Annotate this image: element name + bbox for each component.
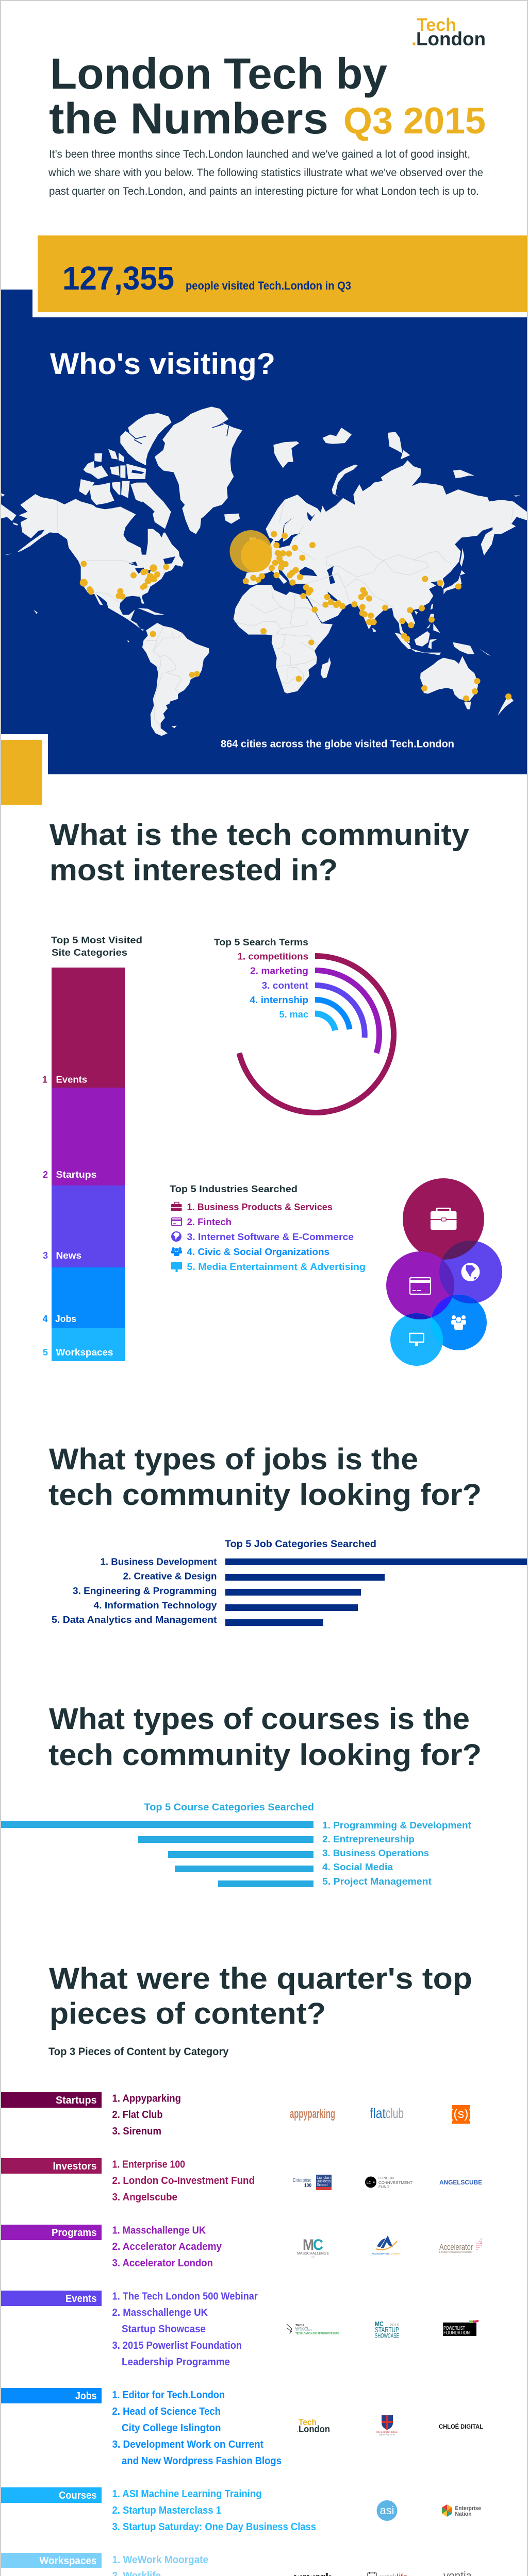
title: London Tech by <box>50 49 387 98</box>
panel: visitor count banner <box>38 235 527 312</box>
logo: powerlist foundation: POWERLIST <box>443 2326 465 2331</box>
logo: lcif: CO-INVESTMENT <box>378 2181 413 2185</box>
intro text: It’s been three months since Tech.London launched and we've gained a lot of good insight, <box>49 148 470 160</box>
panel: visitor count banner: people visited Tech.London in Q3 <box>186 279 351 292</box>
chart: top 5 industries searched list <box>170 1184 366 1272</box>
chart: top 5 industries searched list: 5. Media Entertainment & Advertising <box>187 1262 366 1272</box>
panel: jobs <box>1 2388 483 2467</box>
logo: tech.london <box>296 2417 330 2434</box>
logo: appyparking: appyparking <box>290 2107 335 2121</box>
chart: top 5 course categories: 1. Programming & Development <box>322 1820 471 1831</box>
panel: programs: 3. Accelerator London <box>112 2258 213 2269</box>
logo: Tech.London header: . <box>411 28 417 49</box>
chart: top 5 most visited site categories <box>42 935 142 1361</box>
accent: yellow square <box>1 734 48 805</box>
chart: top 5 job categories: 3. Engineering & Programming <box>73 1585 217 1596</box>
logo: sirenum: ((s)) <box>449 2107 473 2121</box>
heading: top pieces of content: pieces of content? <box>50 1997 326 2030</box>
panel: programs <box>1 2225 482 2269</box>
chart: top 5 job categories: 5. Data Analytics and Management <box>52 1614 217 1625</box>
heading: who's visiting: Who's visiting? <box>50 347 275 381</box>
panel: jobs: 2. Head of Science Tech <box>112 2406 221 2417</box>
icon: globe <box>461 1263 480 1281</box>
chart: top 5 job categories: Top 5 Job Categories Searched <box>225 1539 376 1550</box>
icon: small briefcase <box>171 1202 182 1211</box>
chart: top 5 search terms: 3. content <box>262 980 308 991</box>
panel: investors: Investors <box>53 2161 97 2172</box>
logo: masschallenge: UK <box>311 2256 315 2259</box>
logo: enterprise 100: London <box>317 2175 331 2180</box>
logo: lcif: LCIF <box>367 2180 375 2184</box>
logo: accelerator: Accelerator <box>439 2242 473 2252</box>
logo: city college islington: opportunity for all <box>379 2433 395 2436</box>
chart: top 5 industries searched list: Top 5 Industries Searched <box>170 1184 298 1194</box>
london bubble <box>230 530 272 572</box>
icon: small billboard <box>171 1262 182 1272</box>
logo: tech london advocates: LONDON <box>295 2327 308 2330</box>
logo: lcif: LONDON <box>378 2177 394 2180</box>
logo: angelscube: ANGELSCUBE <box>439 2179 482 2186</box>
logo: tech.london: . <box>296 2424 299 2434</box>
chart: top 5 job categories <box>52 1539 527 1626</box>
logo: tech london advocates: TECH <box>295 2324 304 2327</box>
logo: city college islington: City & Islington College <box>376 2431 398 2433</box>
logo: asi: asi <box>380 2504 394 2517</box>
logo: powerlist foundation: FOUNDATION <box>443 2330 470 2336</box>
panel: visitor count banner: 127,355 <box>62 260 174 297</box>
chart: top 5 job categories: 4. Information Technology <box>94 1600 217 1611</box>
panel: programs: 2. Accelerator Academy <box>112 2241 222 2252</box>
chart: top 5 course categories <box>1 1802 471 1887</box>
panel: workspaces: Workspaces <box>39 2555 97 2567</box>
panel: jobs: City College Islington <box>122 2422 221 2434</box>
panel: jobs: 3. Development Work on Current <box>112 2439 263 2450</box>
intro text: which we share with you below. The following statistics illustrate what we've observed over the <box>48 167 483 179</box>
logo: mc startup showcase: 2015 <box>390 2324 399 2327</box>
panel: events: Leadership Programme <box>122 2357 230 2368</box>
chart: top 5 course categories: 5. Project Management <box>322 1876 432 1887</box>
intro text <box>48 148 483 197</box>
title: Q3 2015 <box>343 100 486 142</box>
chart: top 5 search terms: Top 5 Search Terms <box>214 937 308 947</box>
icon: people <box>451 1315 466 1330</box>
chart: top 5 industries searched list: 1. Business Products & Services <box>187 1202 333 1212</box>
chart: top 5 most visited site categories: Top 5 Most Visited <box>51 935 142 945</box>
panel: jobs: Jobs <box>75 2391 97 2402</box>
icon: small card <box>172 1218 182 1225</box>
chart: top 5 most visited site categories: News <box>56 1250 81 1261</box>
logo: enterprise 100: Business <box>317 2179 331 2183</box>
chart: top 5 course categories: 3. Business Operations <box>322 1848 429 1858</box>
chart: top 5 most visited site categories: Workspaces <box>56 1347 113 1358</box>
logo: lcif: FUND <box>378 2185 389 2189</box>
heading: what is the tech community most interested in: most interested in? <box>50 853 338 887</box>
chart: top 5 most visited site categories: Startups <box>56 1170 97 1180</box>
panel: courses <box>1 2487 481 2533</box>
panel: courses: 3. Startup Saturday: One Day Business Class <box>112 2521 316 2533</box>
panel: events: Events <box>65 2293 97 2304</box>
logo: enterprise nation <box>442 2504 481 2517</box>
chart: top 5 industries searched list: 3. Internet Software & E-Commerce <box>187 1232 354 1242</box>
logo: enterprise nation: Nation <box>455 2511 472 2517</box>
logo: accelerator <box>439 2239 482 2254</box>
logo: mc startup showcase: SHOWCASE <box>375 2332 399 2340</box>
chart: top 5 most visited site categories: Jobs <box>55 1314 76 1324</box>
panel: who's visiting map <box>1 290 527 774</box>
logo: enterprise 100: 100 <box>304 2183 311 2189</box>
chart: overlapping industry circles <box>386 1178 502 1366</box>
logo: masschallenge <box>297 2236 329 2259</box>
logo: accelerator: London's Business Incubator <box>439 2251 472 2254</box>
logo: accelerator academy: ACCELERATOR <box>372 2252 389 2255</box>
caption: cities count: 864 cities across the globe visited Tech.London <box>221 739 454 750</box>
logo: masschallenge: MASSCHALLENGE <box>297 2252 329 2256</box>
panel: courses: 1. ASI Machine Learning Training <box>112 2488 262 2500</box>
panel: investors: 1. Enterprise 100 <box>112 2159 185 2170</box>
chart: top 5 search terms: 4. internship <box>250 995 308 1005</box>
heading: what is the tech community most interested in <box>50 818 469 887</box>
cities: dot markers <box>80 530 512 702</box>
title <box>49 49 486 143</box>
panel: startups: Startups <box>56 2095 97 2106</box>
chart: top 5 search terms <box>214 937 394 1112</box>
chart: top 5 most visited site categories: 5 <box>43 1347 48 1358</box>
logo: Tech.London header: Tech <box>417 15 456 35</box>
logo: mc startup showcase: STARTUP <box>375 2326 399 2334</box>
chart: top 5 job categories: 1. Business Development <box>100 1556 217 1567</box>
panel: events: 2. Masschallenge UK <box>112 2307 208 2318</box>
logo: city college islington <box>376 2415 398 2436</box>
chart: top 5 course categories: Top 5 Course Categories Searched <box>144 1802 314 1813</box>
panel: startups: 1. Appyparking <box>112 2093 181 2104</box>
panel: events: Startup Showcase <box>122 2324 206 2335</box>
logo: enterprise 100: School <box>317 2182 327 2187</box>
logo: Tech.London header: London <box>416 28 486 49</box>
logo: masschallenge: C <box>313 2236 323 2253</box>
panel: courses: 2. Startup Masterclass 1 <box>112 2505 221 2516</box>
chart: top 5 most visited site categories: Events <box>56 1075 87 1085</box>
heading: jobs: tech community looking for? <box>48 1478 482 1512</box>
logo: tech london advocates: ADVOCATES <box>295 2329 312 2332</box>
panel: events: 1. The Tech London 500 Webinar <box>112 2291 258 2302</box>
chart: top 5 most visited site categories: 3 <box>43 1250 48 1261</box>
chart: top 5 most visited site categories: 2 <box>43 1170 48 1180</box>
logo: mc startup showcase: MC <box>375 2320 384 2328</box>
icon: billboard <box>409 1333 424 1346</box>
heading: what is the tech community most interested in: What is the tech community <box>50 818 469 852</box>
heading: courses: What types of courses is the <box>49 1702 470 1736</box>
heading: jobs: What types of jobs is the <box>49 1443 418 1476</box>
logo: chloe digital: CHLOÉ DIGITAL <box>439 2422 483 2430</box>
panel: startups: 2. Flat Club <box>112 2109 163 2121</box>
panel: workspaces: 1. WeWork Moorgate <box>112 2554 208 2566</box>
logo: powerlist foundation <box>443 2320 478 2336</box>
icon: small globe <box>171 1231 182 1242</box>
logo: flatclub: club <box>386 2105 404 2121</box>
logo: mc startup showcase <box>375 2320 399 2340</box>
heading: courses <box>48 1702 482 1772</box>
panel: workspaces <box>1 2553 472 2576</box>
logo: tech london advocates: TECH LONDON 500 APPRENTICESHIPS <box>295 2332 340 2335</box>
world map <box>1 406 527 736</box>
panel: startups <box>1 2092 473 2137</box>
subheading: top 3 pieces of content: Top 3 Pieces of Content by Category <box>48 2046 229 2058</box>
logo: lcif <box>365 2176 413 2189</box>
panel: investors <box>1 2158 482 2203</box>
chart: top 5 search terms: 2. marketing <box>250 965 308 976</box>
panel: startups: 3. Sirenum <box>112 2126 161 2137</box>
chart: top 5 search terms: 5. mac <box>279 1009 308 1020</box>
icon: briefcase <box>431 1209 457 1230</box>
logo: enterprise nation: Enterprise <box>455 2505 481 2512</box>
logo: tech.london: Tech <box>299 2417 317 2427</box>
chart: top 5 most visited site categories: Site Categories <box>52 947 127 958</box>
chart: top 5 most visited site categories: 1 <box>42 1075 47 1085</box>
heading: top pieces of content: What were the quarter's top <box>49 1962 472 1995</box>
logo: flatclub: flat <box>370 2105 386 2121</box>
chart: top 5 most visited site categories: 4 <box>42 1314 48 1324</box>
panel: investors: 3. Angelscube <box>112 2192 177 2203</box>
logo: tech london advocates <box>287 2324 340 2335</box>
heading: courses: tech community looking for? <box>48 1738 482 1772</box>
panel: programs: Programs <box>52 2227 97 2239</box>
chart: top 5 course categories: 4. Social Media <box>322 1861 393 1872</box>
intro text: past quarter on Tech.London, and paints an interesting picture for what London tech is up to. <box>49 185 479 197</box>
icon: card <box>410 1278 431 1294</box>
chart: top 5 search terms: 1. competitions <box>237 951 308 961</box>
panel: jobs: 1. Editor for Tech.London <box>112 2389 225 2401</box>
chart: top 5 job categories: 2. Creative & Design <box>123 1570 217 1582</box>
logo: asi <box>376 2500 397 2521</box>
logo: worklife <box>368 2572 408 2576</box>
logo: flatclub <box>370 2105 404 2121</box>
chart: top 5 course categories: 2. Entrepreneurship <box>322 1834 415 1844</box>
logo: accelerator academy: ACADEMY <box>389 2252 401 2255</box>
logo: enterprise 100 <box>293 2175 332 2190</box>
panel: investors: 2. London Co-Investment Fund <box>112 2175 255 2187</box>
logo: accelerator academy <box>372 2235 401 2255</box>
title: the Numbers <box>49 94 328 143</box>
logo: masschallenge: M <box>303 2236 314 2253</box>
chart: top 5 industries searched list: 2. Fintech <box>187 1217 232 1227</box>
panel: programs: 1. Masschallenge UK <box>112 2225 206 2236</box>
heading: jobs <box>48 1443 482 1512</box>
panel: events <box>1 2291 478 2368</box>
chart: top 5 industries searched list: 4. Civic & Social Organizations <box>187 1247 329 1257</box>
panel: courses: Courses <box>59 2490 97 2501</box>
logo: Tech.London header <box>411 15 486 49</box>
panel: events: 3. 2015 Powerlist Foundation <box>112 2340 242 2351</box>
logo: enterprise 100: Enterprise <box>293 2178 311 2183</box>
logo: tech.london: London <box>299 2424 330 2434</box>
panel: jobs: and New Wordpress Fashion Blogs <box>122 2455 282 2467</box>
icon: small people <box>171 1247 182 1256</box>
heading: top pieces of content <box>49 1962 472 2030</box>
